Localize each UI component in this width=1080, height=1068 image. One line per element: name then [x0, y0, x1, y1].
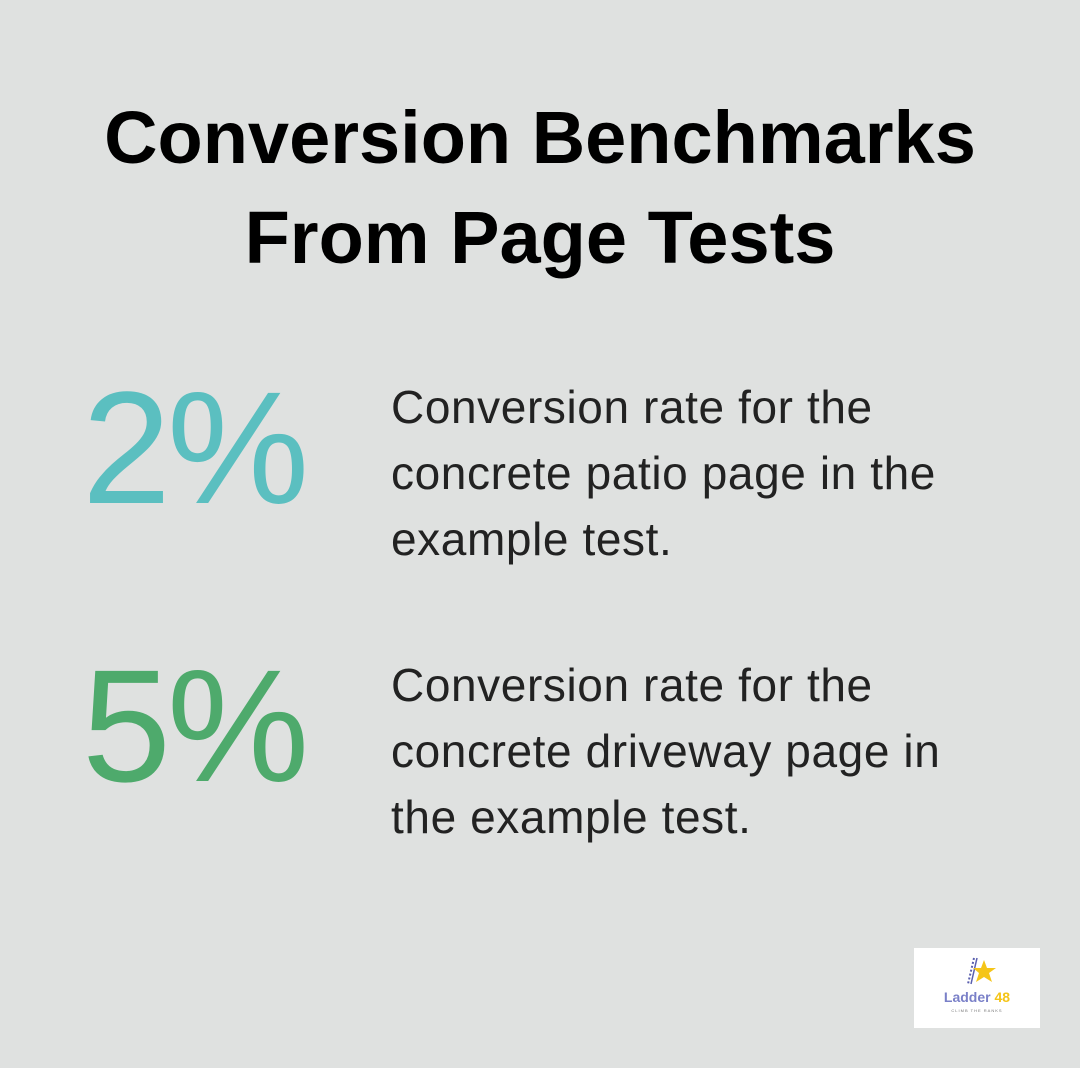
title: Conversion Benchmarks: [104, 96, 976, 179]
description: 2%: example test.: [391, 513, 672, 565]
stat: 5%: 5%: [82, 636, 305, 815]
description: 2%: [391, 381, 936, 565]
description: 2%: Conversion rate for the: [391, 381, 873, 433]
description: 5%: [391, 659, 940, 843]
title: [104, 96, 976, 279]
logo text: Ladder 48: [944, 989, 1010, 1005]
description: 5%: concrete driveway page in: [391, 725, 940, 777]
description: 5%: Conversion rate for the: [391, 659, 873, 711]
logo: Ladder 48: CLIMB THE RANKS: [951, 1008, 1003, 1013]
logo: Ladder 48: [914, 948, 1040, 1028]
icon: ladder star: [967, 958, 996, 984]
description: 2%: concrete patio page in the: [391, 447, 936, 499]
title: From Page Tests: [245, 196, 835, 279]
description: 5%: the example test.: [391, 791, 752, 843]
stat: 2%: 2%: [82, 358, 305, 537]
